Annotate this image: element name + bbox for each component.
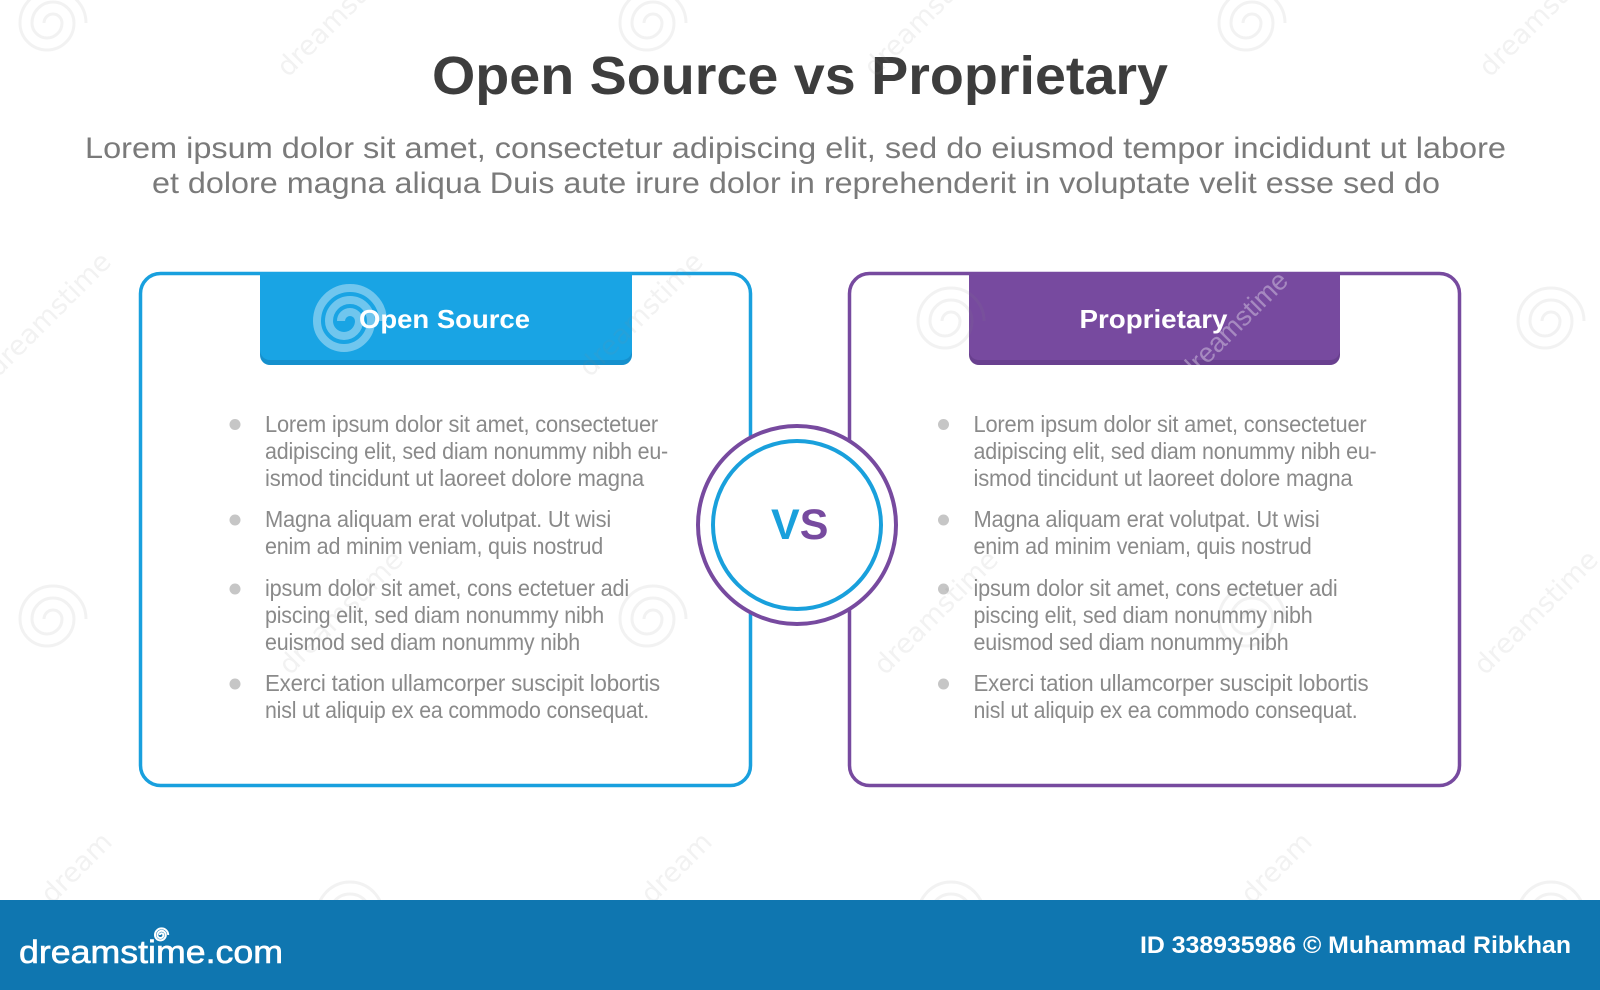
proprietary bullet list: ipsum dolor sit amet, cons ectetuer adi — [974, 575, 1338, 601]
proprietary bullet list: piscing elit, sed diam nonummy nibh — [974, 602, 1312, 628]
vs badge: VS — [771, 501, 828, 549]
proprietary header tab: dreamstime — [1173, 265, 1294, 386]
proprietary bullet list: ismod tincidunt ut laoreet dolore magna — [974, 465, 1353, 491]
watermark overlay: dream — [35, 826, 119, 910]
footer credit: ID 338935986 © Muhammad Ribkhan — [1140, 932, 1571, 959]
vs badge — [698, 426, 896, 624]
open source bullet list: euismod sed diam nonummy nibh — [265, 629, 580, 655]
proprietary bullet list: adipiscing elit, sed diam nonummy nibh eu- — [974, 438, 1376, 464]
open source bullet list: ismod tincidunt ut laoreet dolore magna — [265, 465, 644, 491]
watermark overlay: dreamstime — [273, 544, 410, 681]
open source header tab — [260, 272, 632, 365]
proprietary bullet list: Exerci tation ullamcorper suscipit lobortis — [974, 670, 1368, 696]
proprietary header tab — [969, 265, 1340, 386]
proprietary bullet list: nisl ut aliquip ex ea commodo consequat. — [974, 697, 1358, 723]
open source bullet list: nisl ut aliquip ex ea commodo consequat. — [265, 697, 649, 723]
open source bullet list: Lorem ipsum dolor sit amet, consectetuer — [265, 411, 659, 437]
panel: proprietary — [850, 265, 1460, 786]
watermark overlay: dreamstime — [573, 246, 710, 383]
open source bullet list: enim ad minim veniam, quis nostrud — [265, 533, 603, 559]
open source bullet list: Magna aliquam erat volutpat. Ut wisi — [265, 506, 611, 532]
proprietary bullet list: enim ad minim veniam, quis nostrud — [974, 533, 1312, 559]
subtitle — [85, 132, 1506, 200]
open source bullet list: piscing elit, sed diam nonummy nibh — [265, 602, 604, 628]
open source bullet list: adipiscing elit, sed diam nonummy nibh eu- — [265, 438, 668, 464]
watermark overlay: dreamstime — [868, 544, 1005, 681]
open source bullet list — [230, 411, 668, 723]
subtitle: et dolore magna aliqua Duis aute irure dolor in reprehenderit in voluptate velit esse sed do — [152, 167, 1440, 200]
open source bullet list: Exerci tation ullamcorper suscipit lobortis — [265, 670, 660, 696]
footer logo: dreamstime.com — [19, 934, 283, 970]
subtitle: Lorem ipsum dolor sit amet, consectetur adipiscing elit, sed do eiusmod tempor incididunt ut labore — [85, 132, 1506, 165]
proprietary bullet list: Magna aliquam erat volutpat. Ut wisi — [974, 506, 1320, 532]
proprietary header tab: Proprietary — [1080, 304, 1228, 334]
panel: open source — [140, 272, 750, 786]
proprietary bullet list: Lorem ipsum dolor sit amet, consectetuer — [974, 411, 1367, 437]
proprietary bullet list — [938, 411, 1376, 723]
proprietary bullet list: euismod sed diam nonummy nibh — [974, 629, 1288, 655]
footer bar — [0, 900, 1600, 990]
open source header tab: Open Source — [359, 304, 530, 334]
title: Open Source vs Proprietary — [432, 46, 1168, 106]
watermark overlay: dream — [1235, 826, 1319, 910]
open source bullet list: ipsum dolor sit amet, cons ectetuer adi — [265, 575, 629, 601]
watermark overlay: dream — [635, 826, 719, 910]
